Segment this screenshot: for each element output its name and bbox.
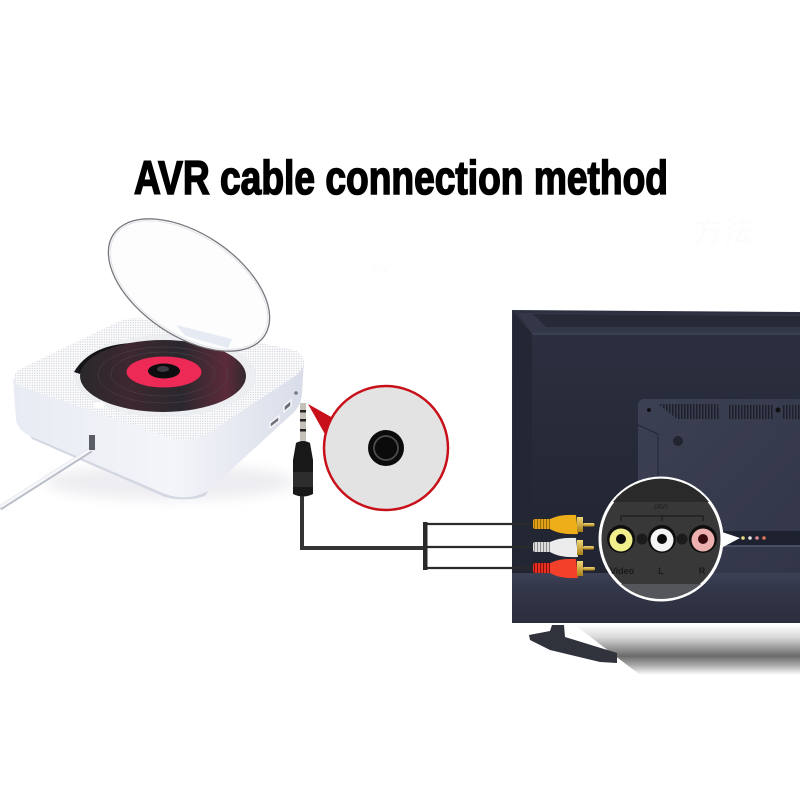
video jack — [607, 525, 635, 553]
TV left bevel — [513, 312, 532, 572]
callout pointer — [308, 404, 333, 436]
disc label — [126, 356, 202, 388]
vinyl disc — [80, 340, 246, 412]
main cable — [302, 496, 425, 548]
power cable — [0, 435, 95, 508]
side ports — [270, 391, 298, 428]
TV back — [512, 310, 800, 675]
screws — [647, 408, 651, 412]
branch cables — [425, 524, 535, 568]
yellow RCA plug — [533, 515, 594, 534]
TV lower band — [512, 573, 800, 623]
player top face — [14, 318, 304, 439]
TV inner panel — [638, 399, 800, 573]
vents — [658, 404, 719, 419]
power socket — [89, 435, 95, 450]
audio plug — [293, 403, 313, 496]
player bottom edge — [30, 436, 208, 499]
AV strip — [700, 531, 800, 546]
AV bracket — [621, 516, 703, 521]
port labels: R — [699, 566, 706, 576]
red RCA plug — [533, 559, 595, 578]
disc clip — [93, 402, 105, 408]
port dots — [741, 536, 766, 540]
port pointer — [722, 532, 740, 547]
title: AVR cable connection method — [134, 151, 668, 204]
AV ports magnifier — [600, 478, 722, 600]
left audio jack — [648, 525, 676, 553]
faint background ghost text: 方法 — [693, 216, 753, 249]
player shadow — [45, 464, 295, 500]
faint background ghost text — [372, 216, 753, 276]
callout circle — [324, 386, 448, 510]
white RCA plug — [533, 538, 594, 557]
TV body — [512, 310, 800, 623]
splitter bar — [423, 522, 428, 570]
headphone jack callout — [308, 386, 448, 510]
tray recess — [74, 343, 132, 374]
port labels: L — [658, 566, 664, 576]
faint background ghost text: AV — [372, 259, 391, 276]
AV ports magnifier: (AV) — [654, 504, 668, 511]
disc tray — [74, 335, 256, 417]
port labels — [610, 566, 706, 576]
port labels: Video — [610, 566, 635, 576]
panel screws — [636, 534, 648, 544]
AV cable — [293, 403, 595, 578]
TV shadow — [575, 625, 800, 675]
disc hole — [148, 364, 180, 378]
TV stand — [529, 625, 617, 663]
right audio jack — [689, 525, 717, 553]
player body — [13, 360, 304, 497]
audio socket — [368, 430, 404, 466]
CD player — [0, 192, 304, 508]
transparent lid — [85, 192, 293, 378]
TV top bevel — [518, 313, 800, 334]
